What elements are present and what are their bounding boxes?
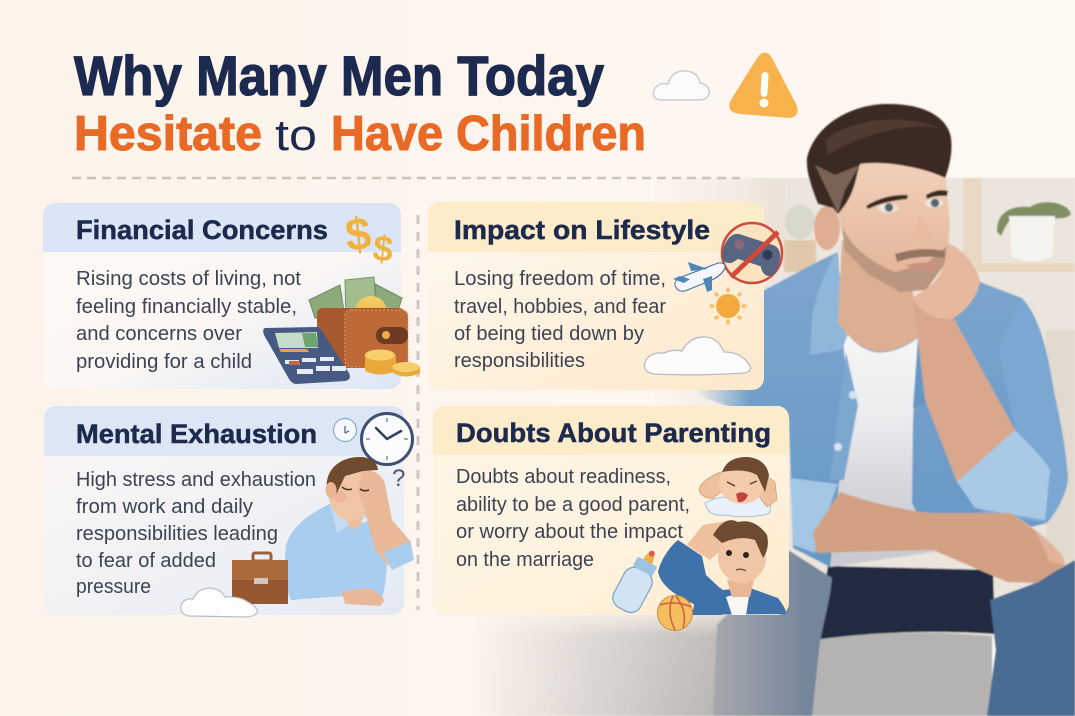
icon: wall clock xyxy=(362,414,412,464)
icon: dollar signs: $ xyxy=(343,207,373,261)
title xyxy=(74,44,646,161)
photo: raised forearm xyxy=(913,297,1015,482)
heading: financial concerns: Financial Concerns xyxy=(76,215,328,245)
photo: room background xyxy=(710,176,1075,639)
icon: warning triangle xyxy=(729,52,798,118)
heading: mental exhaustion: Mental Exhaustion xyxy=(76,419,317,449)
text: mental exhaustion: High stress and exhaustion xyxy=(76,469,316,491)
photo: hair xyxy=(807,104,951,214)
text: financial concerns: feeling financially stable, xyxy=(76,296,297,318)
photo: eyebrows and eyes xyxy=(866,190,948,242)
heading band: impact on lifestyle xyxy=(428,202,764,252)
title word: to: to xyxy=(275,111,317,160)
panel: financial concerns xyxy=(43,203,420,389)
title line 2: Hesitate xyxy=(74,107,262,161)
icon: coin stacks xyxy=(365,350,420,376)
icon: briefcase xyxy=(232,553,288,604)
photo: crossed forearm and hand xyxy=(813,492,1065,583)
photo: ear xyxy=(814,206,840,250)
panel: mental exhaustion xyxy=(44,406,414,617)
title line 1: Why Many Men Today xyxy=(74,44,604,107)
text: financial concerns: and concerns over xyxy=(76,323,242,345)
icon: dollar signs: $ xyxy=(371,227,395,270)
illustration: crying baby xyxy=(699,457,777,517)
photo: seated man thinking xyxy=(470,104,1075,716)
text: doubts about parenting: ability to be a good parent, xyxy=(456,494,690,516)
photo: collar and placket xyxy=(810,252,935,480)
photo: neck xyxy=(838,240,918,351)
photo: beard xyxy=(842,226,947,292)
text: mental exhaustion: pressure xyxy=(76,576,151,598)
text: impact on lifestyle: Losing freedom of time, xyxy=(454,268,666,290)
photo: sofa xyxy=(470,612,992,716)
photo: jeans xyxy=(713,548,1075,716)
icon: wallet with cash xyxy=(309,277,408,368)
photo: rolled right sleeve xyxy=(957,430,1050,520)
text: impact on lifestyle: responsibilities xyxy=(454,350,585,372)
icon: sun xyxy=(711,289,745,323)
heading band: doubts about parenting xyxy=(433,406,789,455)
text: impact on lifestyle: travel, hobbies, and fear xyxy=(454,296,666,318)
icon: baby bottle xyxy=(609,544,666,616)
text: doubts about parenting: on the marriage xyxy=(456,549,594,571)
text: financial concerns: providing for a child xyxy=(76,351,252,373)
icon: crossed-out game controller xyxy=(719,223,784,283)
dashed divider under title xyxy=(72,177,740,179)
heading: doubts about parenting: Doubts About Parenting xyxy=(456,418,771,448)
icon: cloud xyxy=(644,337,751,375)
icon: question mark: ? xyxy=(392,465,405,492)
panel: impact on lifestyle xyxy=(428,202,784,390)
panel: doubts about parenting xyxy=(433,406,789,616)
heading band: mental exhaustion xyxy=(44,406,404,456)
icon: small clock xyxy=(334,418,356,442)
vertical dashed divider xyxy=(416,215,420,610)
icon: calculator xyxy=(263,327,350,384)
text: doubts about parenting: Doubts about readiness, xyxy=(456,466,671,488)
text: financial concerns: Rising costs of living, not xyxy=(76,268,301,290)
illustration: tired man at desk xyxy=(285,457,414,606)
photo: t-shirt xyxy=(830,326,935,567)
heading band: financial concerns xyxy=(43,203,401,252)
icon: airplane xyxy=(673,262,725,292)
text: mental exhaustion xyxy=(76,469,316,598)
heading: impact on lifestyle: Impact on Lifestyle xyxy=(454,215,710,245)
icon: dollar signs xyxy=(343,207,395,270)
icon: cloud near title xyxy=(653,71,709,100)
text: mental exhaustion: responsibilities leading xyxy=(76,523,278,545)
icon: ball xyxy=(658,596,692,630)
photo: face xyxy=(838,159,950,292)
text: impact on lifestyle: of being tied down by xyxy=(454,323,644,345)
photo: fist under chin xyxy=(913,243,980,319)
text: mental exhaustion: to fear of added xyxy=(76,550,216,572)
text: doubts about parenting: or worry about the impact xyxy=(456,521,683,543)
text: impact on lifestyle xyxy=(454,268,666,372)
text: doubts about parenting xyxy=(456,466,690,571)
photo: denim shirt xyxy=(695,252,1068,567)
photo: shelf and plant xyxy=(975,202,1075,272)
text: mental exhaustion: from work and daily xyxy=(76,496,253,518)
text: financial concerns xyxy=(76,268,301,373)
icon: cloud xyxy=(181,588,257,617)
title words: have children: Have Children xyxy=(331,107,646,161)
illustration: worried man xyxy=(658,520,786,615)
